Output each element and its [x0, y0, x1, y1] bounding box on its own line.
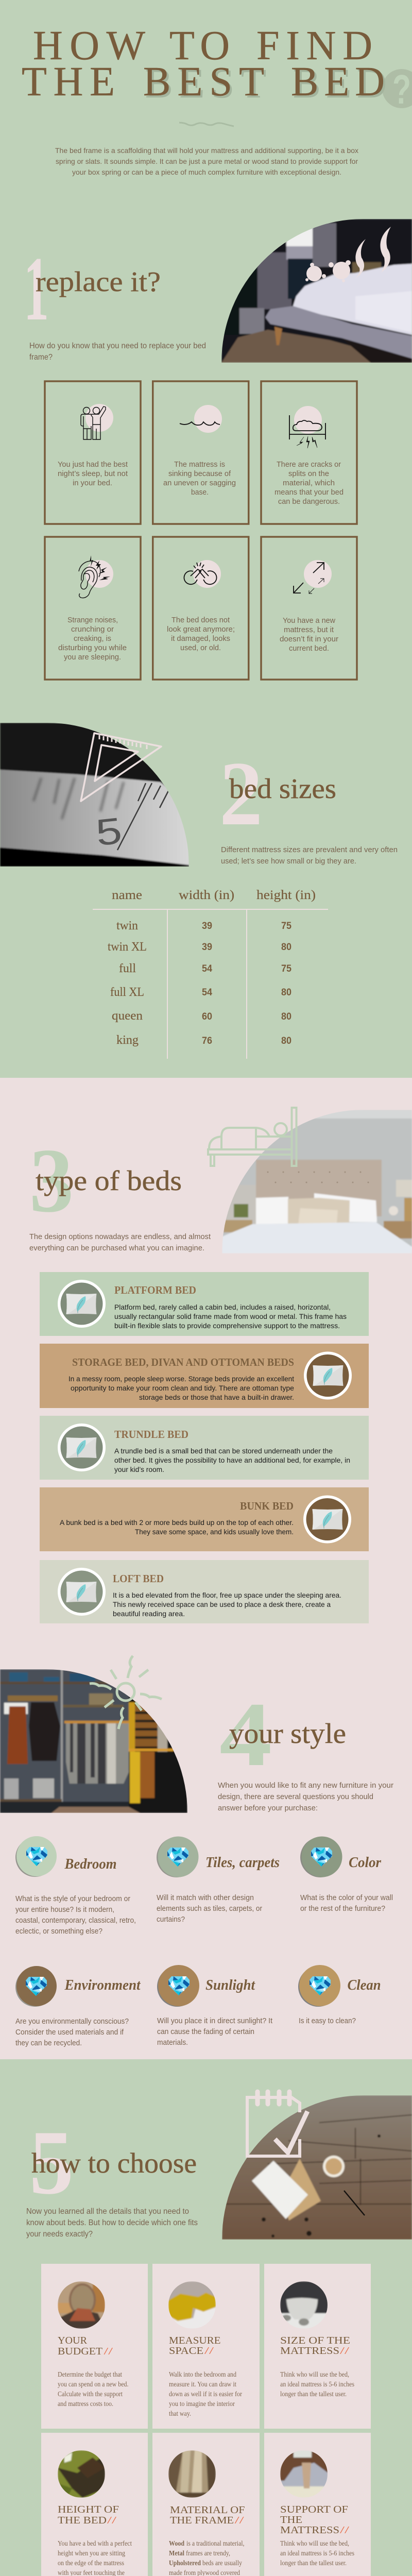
- photo: ceramic bowl: [280, 2281, 328, 2329]
- panel: material of the frame: is a traditional material,: [186, 2539, 244, 2547]
- photo: upholstered bed: [208, 1108, 412, 1253]
- section 5 heading: how to choose: [31, 2147, 197, 2179]
- photo: tree: [58, 2450, 105, 2498]
- section 4 number: 4: [219, 1683, 272, 1785]
- section 1 text: frame?: [29, 353, 53, 362]
- panel: strange noises: [45, 537, 141, 680]
- panel: support of the mattress: [264, 2433, 371, 2576]
- panel: support of the mattress: MATTRESS: [280, 2524, 339, 2536]
- panel: best night's sleep: in your bed.: [73, 479, 112, 487]
- table values: 54: [202, 963, 212, 974]
- item: environment: they can be recycled.: [15, 2039, 82, 2047]
- icon: cracked bed: [289, 415, 325, 448]
- photo: bed with steam: [221, 219, 412, 363]
- intro text: your box spring or can be a piece of much complex furniture with exceptional design.: [72, 168, 341, 176]
- panel: material of the frame: MATERIAL OF: [170, 2504, 245, 2516]
- section 2 text: Different mattress sizes are prevalent and very often: [221, 846, 398, 854]
- section 1 heading: replace it?: [36, 266, 161, 297]
- panel: your budget: Determine the budget that: [58, 2370, 122, 2378]
- item: bedroom: your entire house? Is it modern,: [15, 1906, 114, 1914]
- section 5 text: your needs exactly?: [26, 2230, 93, 2239]
- panel: mattress sinking: sinking because of: [168, 470, 231, 478]
- photo: propped tree: [280, 2450, 328, 2498]
- photo: measuring tape: [168, 2281, 216, 2329]
- section 2 text: [221, 846, 398, 866]
- table values: 60: [202, 1011, 212, 1022]
- panel: trundle bed: your kid’s room.: [114, 1465, 164, 1473]
- photo: wardrobe: [0, 1656, 187, 1813]
- title: [22, 23, 387, 107]
- table values: 75: [281, 963, 291, 974]
- title: HOW: [33, 23, 145, 69]
- panel: strange noises: crunching or: [71, 625, 114, 634]
- panel: support of the mattress: an ideal mattress is 5-6 inches: [280, 2549, 354, 2557]
- panel: height of the bed: //: [107, 2515, 117, 2526]
- panel: bed looks old: [153, 537, 249, 680]
- icon: broken chain: [184, 563, 217, 584]
- title: BEST: [145, 61, 266, 107]
- panel: platform bed: usually rectangular solid frame made from wood or metal. This frame has: [114, 1312, 347, 1320]
- item: bedroom: eclectic, or something else?: [15, 1927, 102, 1936]
- panel: material of the frame: beds are usually: [202, 2559, 242, 2567]
- panel: your budget: [41, 2264, 148, 2429]
- table names: [108, 919, 147, 1047]
- section 3 text: everything can be purchased what you can imagine.: [29, 1244, 204, 1252]
- panel: trundle bed: [40, 1416, 369, 1480]
- panel: mattress sinking: The mattress is: [174, 461, 225, 469]
- panel: your budget: YOUR: [58, 2335, 88, 2346]
- panel: cracks: can be dangerous.: [278, 498, 340, 506]
- title: BEST: [143, 59, 264, 105]
- table header: [112, 888, 316, 902]
- panel: storage bed: [40, 1344, 369, 1408]
- panel: size of the mattress: an ideal mattress is 5-6 inches: [280, 2380, 354, 2388]
- table header: width (in): [179, 888, 234, 902]
- panel: size of the mattress: [264, 2264, 371, 2429]
- item: clean: [298, 1965, 381, 2025]
- table header: name: [112, 888, 142, 902]
- item: color: [300, 1836, 393, 1913]
- panel: your budget: //: [104, 2346, 113, 2357]
- panel: new mattress doesn't fit: [261, 537, 357, 680]
- table values: 80: [281, 942, 291, 953]
- table names: full XL: [110, 986, 144, 999]
- table names: twin: [116, 919, 138, 933]
- panel: bed looks old: it damaged, looks: [171, 635, 230, 643]
- table: bed sizes: [93, 888, 328, 1059]
- panel: height of the bed: [41, 2433, 148, 2576]
- panel: material of the frame: Wood: [169, 2539, 184, 2547]
- section 4 text: [218, 1781, 393, 1812]
- item: sunlight: [157, 1965, 272, 2047]
- panel: size of the mattress: SIZE OF THE: [280, 2335, 350, 2346]
- section 5 text: know about beds. But how to decide which one fits: [26, 2218, 198, 2227]
- section 3 number: 3: [29, 1129, 74, 1231]
- item: tiles, carpets: [157, 1836, 280, 1924]
- item: color: Color: [349, 1855, 382, 1871]
- panel: your budget: you can spend on a new bed.: [58, 2380, 129, 2388]
- panel: strange noises: creaking, is: [74, 635, 111, 643]
- icon: pillow: [303, 1495, 351, 1544]
- table names: full: [119, 962, 136, 975]
- panel: strange noises: Strange noises,: [67, 616, 118, 624]
- ruler numeral: 5: [94, 810, 124, 854]
- icon: sun: [90, 1656, 162, 1729]
- icon: ear with noise: [79, 555, 110, 598]
- section 4 text: answer before your purchase:: [218, 1804, 318, 1812]
- panel: cracks: material, which: [283, 479, 335, 487]
- item: sunlight: Will you place it in direct sunlight? It: [157, 2017, 272, 2025]
- table values: 75: [281, 921, 291, 931]
- panel: material of the frame: Metal: [169, 2549, 184, 2557]
- item: tiles, carpets: Tiles, carpets: [205, 1855, 280, 1871]
- icon: person in bed: [208, 1108, 297, 1166]
- photo: ruler: [0, 723, 189, 867]
- section 5 number: 5: [29, 2111, 74, 2213]
- panel: support of the mattress: SUPPORT OF: [280, 2504, 348, 2515]
- panel: measure space: Walk into the bedroom and: [169, 2370, 236, 2378]
- section 1 text: [29, 342, 206, 362]
- panel: measure space: that way.: [169, 2410, 191, 2417]
- panel: bed looks old: look great anymore;: [167, 625, 235, 634]
- item: color: What is the color of your wall: [300, 1894, 393, 1902]
- panel: height of the bed: on the edge of the mattress: [58, 2559, 124, 2567]
- section 5 text: Now you learned all the details that you need to: [26, 2207, 189, 2216]
- panel: mattress sinking: an uneven or sagging: [163, 479, 236, 487]
- panel: platform bed: Platform bed, rarely called a cabin bed, includes a raised, horizontal,: [114, 1303, 331, 1311]
- item: sunlight: Sunlight: [205, 1977, 255, 1993]
- table header: height (in): [256, 888, 316, 902]
- panel: support of the mattress: THE: [280, 2514, 302, 2526]
- intro text: The bed frame is a scaffolding that will hold your mattress and additional supporting, be it a box: [55, 146, 358, 155]
- panel: support of the mattress: Think who will use the bed,: [280, 2539, 349, 2547]
- table names: queen: [112, 1009, 143, 1023]
- section 3 heading: type of beds: [36, 1165, 182, 1196]
- table values: [202, 921, 291, 1046]
- icon: steam: [305, 227, 391, 282]
- photo: coins: [58, 2281, 105, 2329]
- panel: height of the bed: You have a bed with a perfect: [58, 2539, 132, 2547]
- item: sunlight: can cause the fading of certain: [157, 2028, 254, 2036]
- panel: storage bed: In a messy room, people sleep worse. Storage beds provide an excellent: [68, 1375, 294, 1383]
- panel: material of the frame: Upholstered: [169, 2559, 201, 2567]
- panel: loft bed: [40, 1560, 369, 1623]
- icon: set square: [81, 733, 161, 801]
- panel: best night's sleep: You just had the best: [58, 461, 128, 469]
- item: environment: Environment: [64, 1977, 141, 1993]
- panel: bunk bed: BUNK BED: [240, 1500, 294, 1512]
- panel: measure space: down as well if it is easier for: [169, 2390, 242, 2398]
- panel: new mattress doesn't fit: doesn’t fit in your: [280, 635, 338, 643]
- panel: storage bed: STORAGE BED, DIVAN AND OTTOMAN BEDS: [72, 1356, 294, 1368]
- item: environment: Are you environmentally conscious?: [15, 2018, 129, 2026]
- panel: cracks: [261, 381, 357, 524]
- panel: new mattress doesn't fit: current bed.: [289, 645, 329, 653]
- title: TO: [169, 23, 230, 69]
- table values: 80: [281, 987, 291, 998]
- panel: measure space: you to imagine the interior: [169, 2400, 235, 2408]
- panel: support of the mattress: //: [340, 2524, 350, 2536]
- panel: strange noises: disturbing you while: [58, 644, 127, 652]
- title: FIND: [256, 23, 372, 69]
- table values: 76: [202, 1036, 212, 1046]
- panel: height of the bed: height when you are sitting: [58, 2549, 125, 2557]
- panel: measure space: MEASURE: [169, 2335, 220, 2346]
- panel: material of the frame: THE FRAME: [170, 2515, 234, 2526]
- panel: loft bed: LOFT BED: [113, 1572, 164, 1585]
- panel: size of the mattress: //: [340, 2345, 350, 2357]
- item: sunlight: materials.: [157, 2039, 188, 2047]
- panel: mattress sinking: [153, 381, 249, 524]
- panel: loft bed: It is a bed elevated from the floor, free up space under the sleeping area.: [113, 1591, 341, 1599]
- panel: platform bed: PLATFORM BED: [114, 1284, 196, 1296]
- panel: platform bed: [40, 1272, 369, 1336]
- table values: 54: [202, 987, 212, 998]
- table values: 80: [281, 1036, 291, 1046]
- panel: your budget: Calculate with the support: [58, 2390, 123, 2398]
- panel: measure space: [152, 2264, 260, 2429]
- item: clean: Is it easy to clean?: [299, 2017, 356, 2025]
- table values: 39: [202, 921, 212, 931]
- panel: cracks: splits on the: [288, 470, 329, 478]
- icon: pillow: [58, 1423, 106, 1471]
- section 1 number: 1: [24, 238, 49, 340]
- icon: pillow: [58, 1568, 106, 1616]
- icon: checklist notepad: [247, 2092, 307, 2156]
- panel: size of the mattress: Think who will use the bed,: [280, 2370, 349, 2378]
- panel: storage bed: storage beds or those that have a built-in drawer.: [139, 1393, 294, 1401]
- item: tiles, carpets: Will it match with other design: [157, 1894, 254, 1902]
- item: bedroom: What is the style of your bedroom or: [15, 1895, 130, 1903]
- table values: 39: [202, 942, 212, 953]
- panel: measure space: measure it. You can draw it: [169, 2380, 236, 2388]
- icon: question mark circle: [382, 66, 412, 112]
- panel: platform bed: built-in flexible slats to provide comprehensive support to the mattress.: [114, 1321, 340, 1330]
- title: BED: [293, 61, 387, 107]
- panel: material of the frame: //: [235, 2515, 244, 2526]
- section 2 number: 2: [219, 742, 263, 844]
- item: environment: [15, 1966, 141, 2047]
- panel: bunk bed: A bunk bed is a bed with 2 or more beds build up on the top of each other.: [60, 1518, 294, 1527]
- title: THE: [22, 59, 115, 105]
- intro text: spring or slats. It sounds simple. It can be just a pure metal or wood stand to provide support for: [56, 157, 358, 165]
- title: BED: [291, 59, 385, 105]
- panel: best night's sleep: [45, 381, 141, 524]
- section 2 text: used; let’s see how small or big they are.: [221, 857, 356, 866]
- panel: new mattress doesn't fit: You have a new: [283, 617, 336, 625]
- panel: size of the mattress: longer than the tallest user.: [280, 2390, 347, 2398]
- panel: trundle bed: A trundle bed is a small bed that can be stored underneath under the: [114, 1447, 333, 1455]
- item: tiles, carpets: curtains?: [157, 1916, 185, 1924]
- section 5 text: [26, 2207, 198, 2239]
- icon: sagging wave: [180, 422, 220, 425]
- item: bedroom: coastal, contemporary, classical, retro,: [15, 1917, 136, 1925]
- panel: material of the frame: frames are trendy,: [186, 2549, 230, 2557]
- section 1 text: How do you know that you need to replace your bed: [29, 342, 206, 350]
- section 4 text: When you would like to fit any new furniture in your: [218, 1781, 393, 1790]
- panel: your budget: and mattress costs too.: [58, 2400, 113, 2408]
- section 2 heading: bed sizes: [229, 773, 336, 804]
- icon: pillow: [58, 1280, 106, 1328]
- section 4 heading: your style: [229, 1718, 346, 1749]
- panel: your budget: BUDGET: [58, 2346, 102, 2357]
- panel: loft bed: This newly received space can be used to place a desk there, create a: [113, 1600, 331, 1608]
- panel: trundle bed: other bed. It gives the possibility to have an additional bed, for example, in: [114, 1456, 350, 1464]
- photo: wood boards: [168, 2450, 216, 2498]
- item: bedroom: [15, 1836, 136, 1936]
- icon: pillow: [304, 1352, 352, 1399]
- photo: desk with notes: [222, 2092, 412, 2240]
- panel: cracks: There are cracks or: [277, 461, 341, 469]
- table names: king: [116, 1033, 139, 1047]
- icon: two people: [81, 406, 106, 439]
- panel: measure space: //: [204, 2345, 214, 2357]
- panel: measure space: SPACE: [169, 2345, 203, 2357]
- panel: height of the bed: THE BED: [58, 2515, 107, 2526]
- panel: bunk bed: They save some space, and kids usually love them.: [135, 1528, 294, 1536]
- item: bedroom: Bedroom: [64, 1856, 116, 1872]
- panel: bunk bed: [40, 1487, 369, 1551]
- panel: size of the mattress: MATTRESS: [280, 2345, 339, 2357]
- panel: mattress sinking: base.: [191, 488, 209, 497]
- panel: cracks: means that your bed: [274, 488, 344, 497]
- panel: storage bed: opportunity to make your room clean and tidy. There are ottoman type: [71, 1384, 294, 1392]
- panel: strange noises: you are sleeping.: [64, 653, 121, 662]
- panel: best night's sleep: night’s sleep, but not: [58, 470, 128, 478]
- panel: new mattress doesn't fit: mattress, but it: [284, 626, 334, 634]
- item: tiles, carpets: elements such as tiles, carpets, or: [157, 1905, 262, 1913]
- table names: twin XL: [108, 940, 147, 954]
- panel: height of the bed: HEIGHT OF: [58, 2504, 119, 2515]
- item: clean: Clean: [347, 1977, 381, 1993]
- item: color: or the rest of the furniture?: [300, 1905, 385, 1913]
- table values: 80: [281, 1011, 291, 1022]
- panel: support of the mattress: longer than the tallest user.: [280, 2559, 347, 2567]
- panel: trundle bed: TRUNDLE BED: [114, 1428, 188, 1440]
- intro text: [55, 146, 358, 176]
- wave divider: [179, 123, 234, 126]
- panel: material of the frame: [152, 2433, 260, 2576]
- section 4 text: design, there are several questions you should: [218, 1792, 373, 1801]
- panel: bed looks old: used, or old.: [180, 644, 221, 652]
- section 3 text: The design options nowadays are endless, and almost: [29, 1232, 211, 1241]
- section 3 text: [29, 1232, 211, 1252]
- icon: resize arrows: [294, 563, 324, 594]
- panel: loft bed: beautiful reading area.: [113, 1609, 185, 1618]
- item: environment: Consider the used materials and if: [15, 2028, 124, 2037]
- panel: bed looks old: The bed does not: [171, 616, 230, 624]
